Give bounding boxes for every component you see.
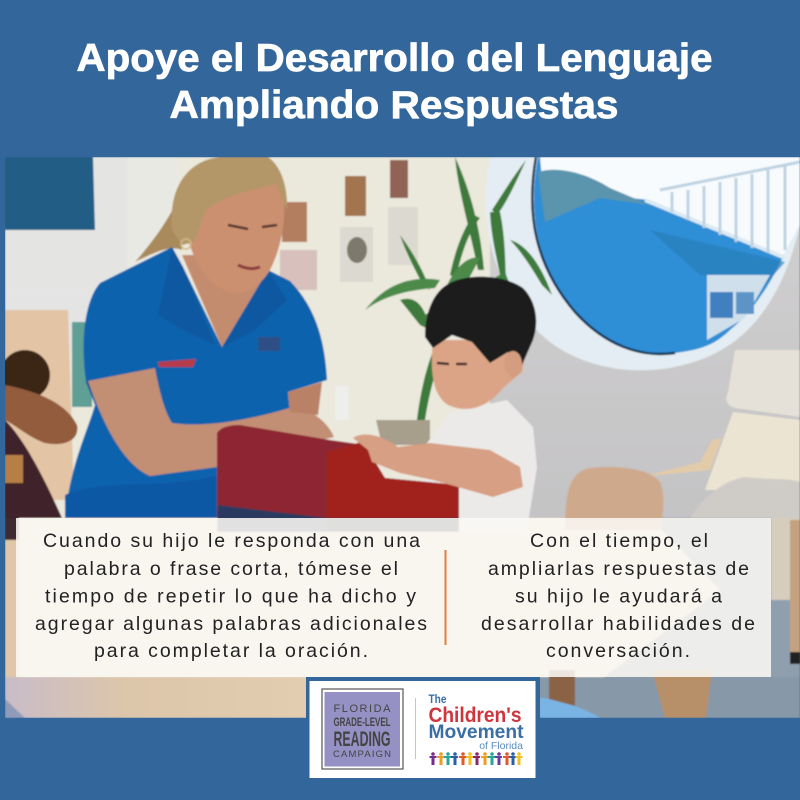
red box xyxy=(217,425,459,532)
logo: Florida Grade-Level Reading Campaign: FLORIDA xyxy=(334,703,391,715)
text panel xyxy=(16,518,771,677)
wood box xyxy=(5,310,74,500)
logo: The Children's Movement of Florida: The xyxy=(428,692,447,706)
logo: Florida Grade-Level Reading Campaign xyxy=(322,689,403,769)
logo: The Children's Movement of Florida: of Florida xyxy=(479,740,523,752)
teacher xyxy=(65,157,334,518)
left text block: tiempo de repetir lo que ha dicho y xyxy=(45,586,416,608)
photo: teacher and child at a table xyxy=(0,157,800,718)
left text block: agregar algunas palabras adicionales xyxy=(35,613,427,635)
earring xyxy=(181,239,191,249)
logo: The Children's Movement of Florida: Children's xyxy=(428,704,522,727)
right text block xyxy=(481,530,755,662)
wooden chair xyxy=(565,467,663,530)
paper-doll people row xyxy=(430,752,522,765)
title: Apoye el Desarrollo del Lenguaje xyxy=(76,37,712,80)
right text block: ampliarlas respuestas de xyxy=(488,558,749,580)
armchair xyxy=(652,350,800,518)
divider xyxy=(444,550,446,645)
boy xyxy=(420,277,537,530)
child arm at left xyxy=(5,385,77,444)
hair xyxy=(172,157,287,245)
plant pot xyxy=(376,420,430,445)
left text block: palabra o frase corta, tómese el xyxy=(64,558,398,580)
wall right xyxy=(490,228,800,518)
logo: Florida Grade-Level Reading Campaign: GRADE-LEVEL xyxy=(334,715,390,729)
ponytail xyxy=(135,205,182,262)
right text block: desarrollar habilidades de xyxy=(481,613,755,635)
neck and chest xyxy=(182,255,268,347)
torso shirt xyxy=(65,247,327,518)
left text block xyxy=(35,530,427,662)
left window xyxy=(100,286,101,287)
wall photos xyxy=(345,176,366,216)
logo: Florida Grade-Level Reading Campaign: CAMPAIGN xyxy=(333,749,391,760)
logo: Florida Grade-Level Reading Campaign: READING xyxy=(334,728,390,751)
face xyxy=(188,183,284,282)
round window xyxy=(486,157,800,370)
logos on shirt xyxy=(158,359,196,367)
floor and table xyxy=(604,518,800,678)
collar xyxy=(158,247,215,345)
logo: The Children's Movement of Florida: Movement xyxy=(428,722,524,743)
right text block: Con el tiempo, el xyxy=(530,530,708,552)
title xyxy=(76,37,712,127)
logo box xyxy=(306,677,540,780)
right text block: su hijo le ayudará a xyxy=(515,586,722,608)
left text block: Cuando su hijo le responda con una xyxy=(43,530,420,552)
plant xyxy=(365,157,552,428)
teacher arm xyxy=(88,368,334,476)
left text block: para completar la oración. xyxy=(94,640,368,662)
right text block: conversación. xyxy=(546,640,690,662)
logo: The Children's Movement of Florida xyxy=(428,692,524,765)
boy arm xyxy=(353,435,523,497)
title: Ampliando Respuestas xyxy=(170,84,618,127)
